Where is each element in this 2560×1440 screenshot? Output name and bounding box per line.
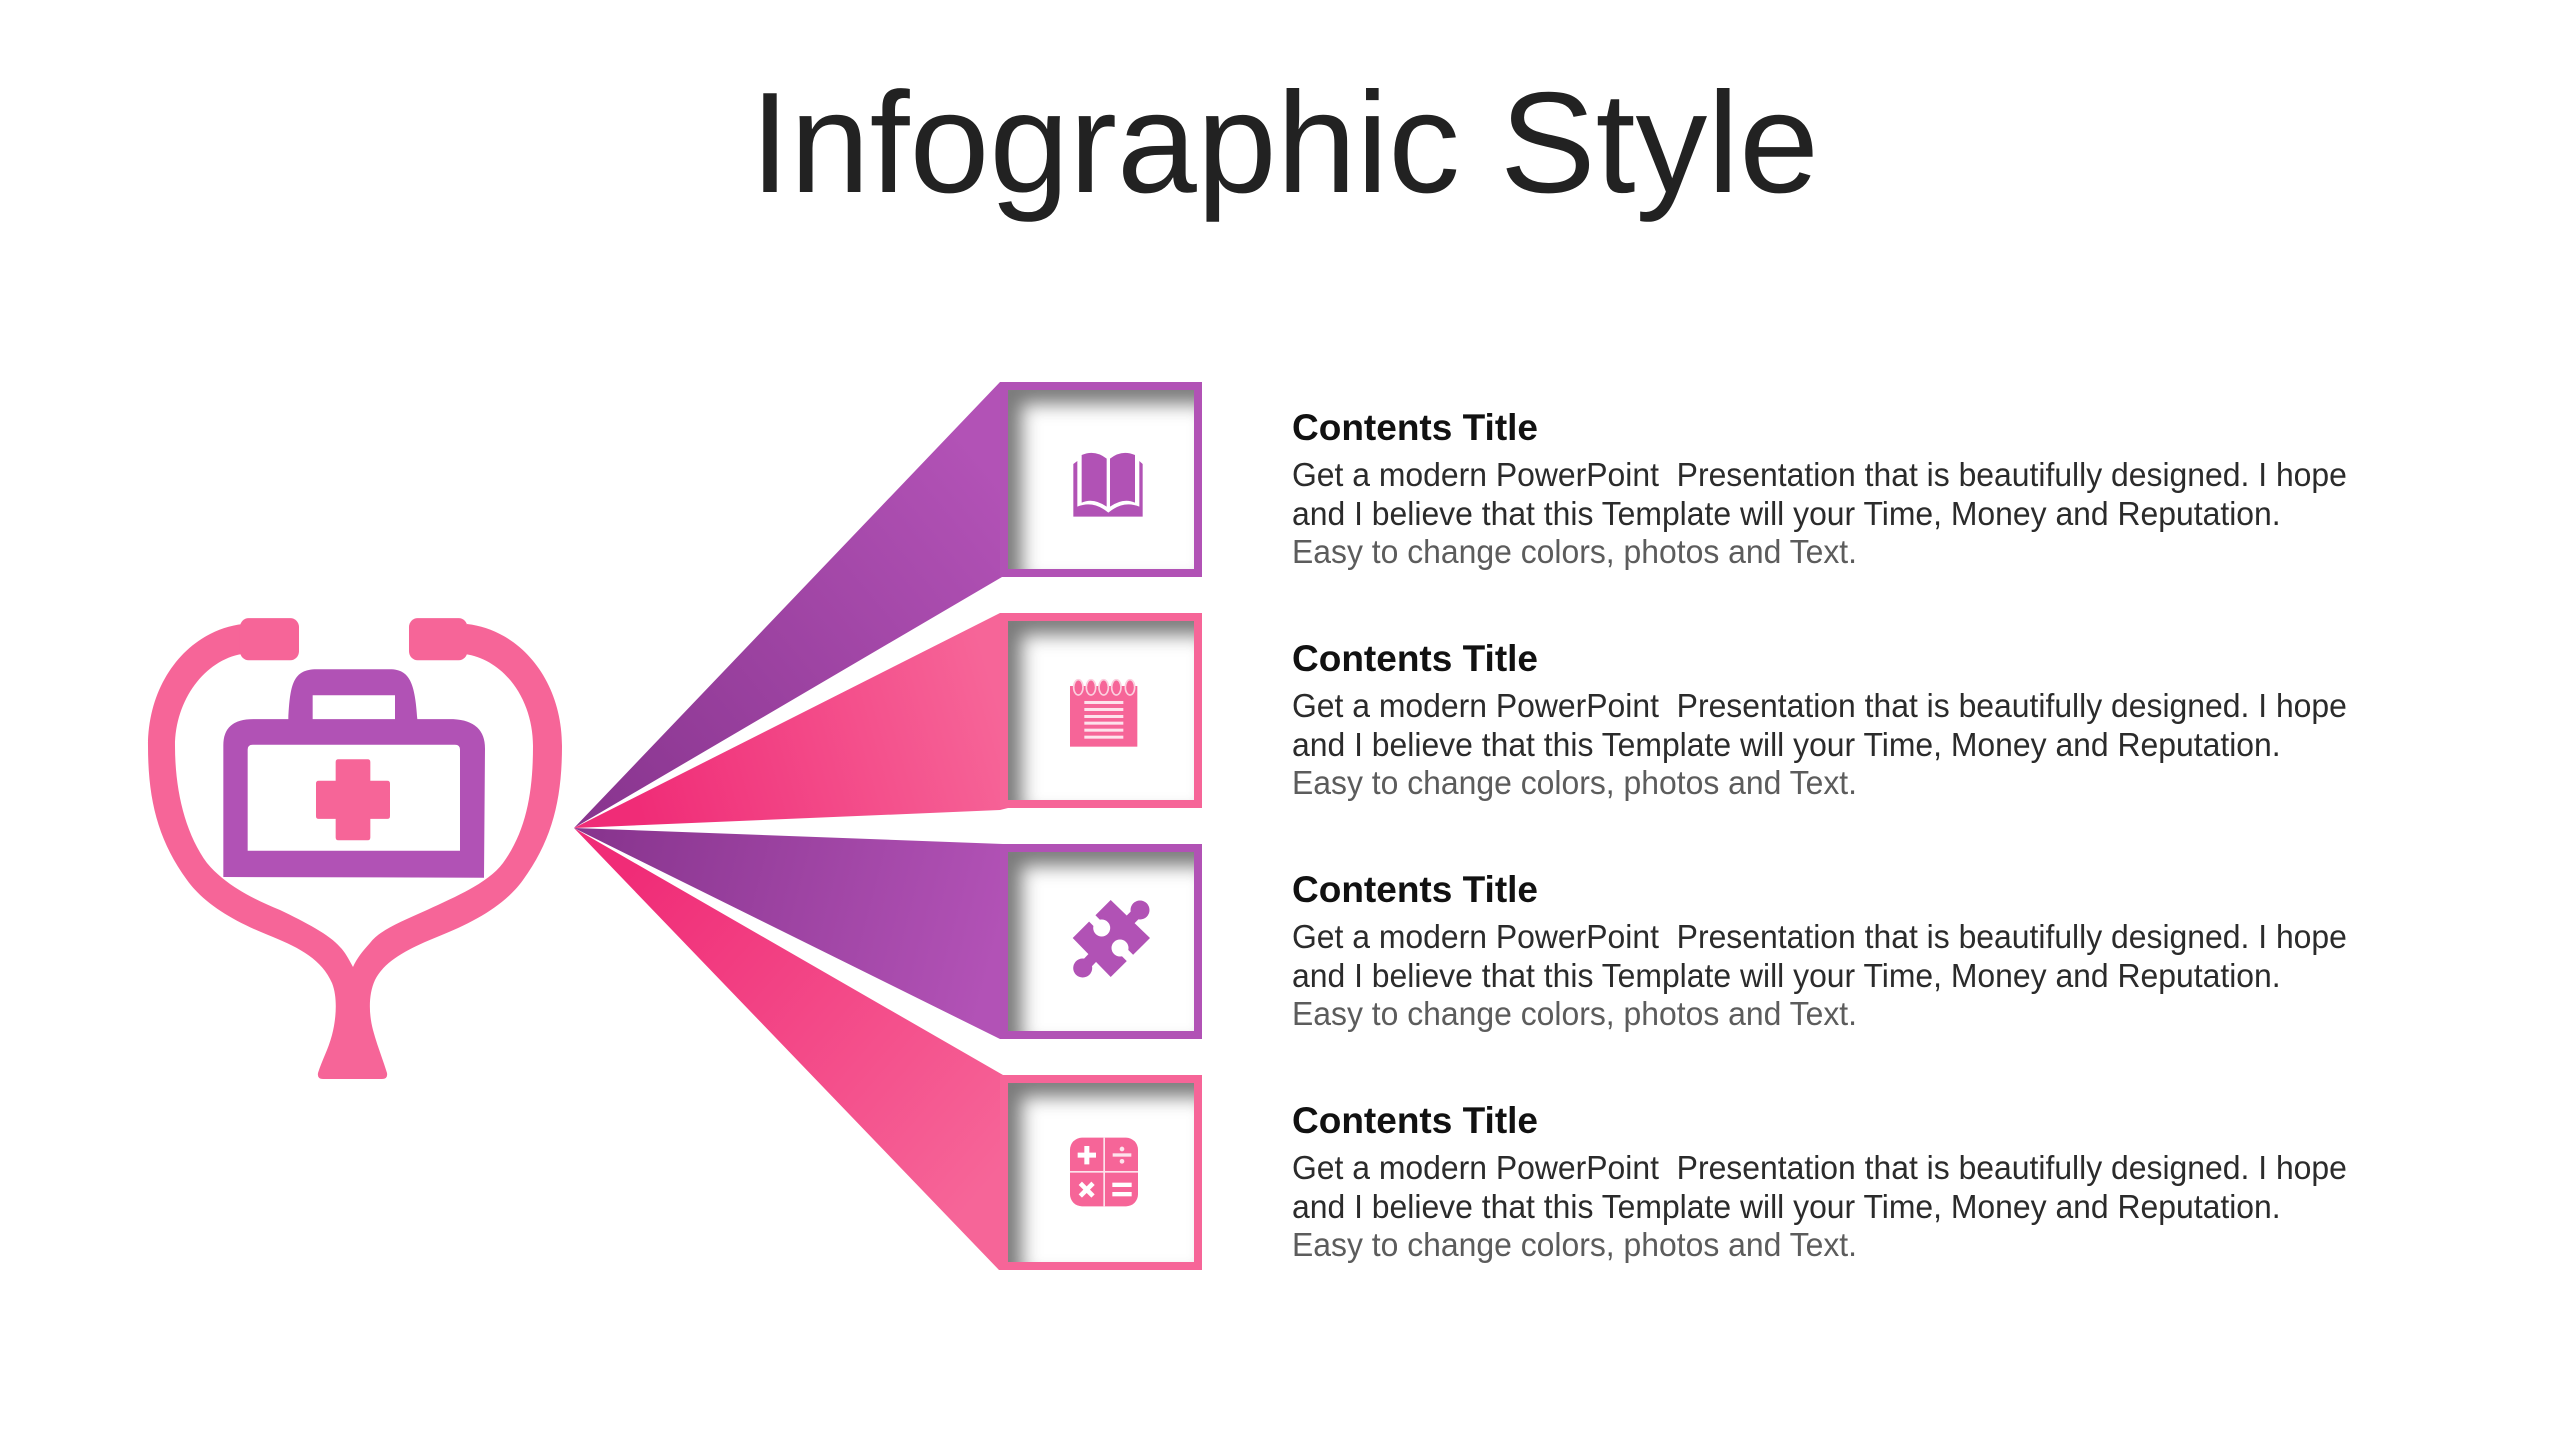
panel: box 4 <box>1000 1075 1202 1270</box>
wedge 2 <box>574 613 1012 828</box>
text block 1: and I believe that this Template will your Time, Money and Reputation. <box>1292 496 2281 532</box>
text block 2: Easy to change colors, photos and Text. <box>1292 765 1857 802</box>
right ear piece <box>409 618 467 660</box>
heading 3: Contents Title <box>1292 869 1538 910</box>
stethoscope tube <box>148 624 562 1079</box>
body 1: Get a modern PowerPoint Presentation that is beautifully designed. I hope <box>1292 457 2347 494</box>
body 3: Get a modern PowerPoint Presentation that is beautifully designed. I hope <box>1292 919 2347 956</box>
panel: box 3 <box>1000 844 1202 1039</box>
text block 2 <box>1292 638 2347 802</box>
text block 4: and I believe that this Template will your Time, Money and Reputation. <box>1292 1188 2281 1226</box>
heading 1: Contents Title <box>1292 407 1538 448</box>
panel: box 2 <box>1000 613 1202 808</box>
heading 2: Contents Title <box>1292 638 1538 679</box>
text block 2: and I believe that this Template will your Time, Money and Reputation. <box>1292 726 2281 764</box>
text block 3: Easy to change colors, photos and Text. <box>1292 996 1857 1033</box>
medical cross <box>316 759 390 840</box>
title: Infographic Style <box>750 63 1819 223</box>
text block 1: Easy to change colors, photos and Text. <box>1292 534 1857 571</box>
text block 3: and I believe that this Template will your Time, Money and Reputation. <box>1292 958 2281 994</box>
text block 3 <box>1292 869 2347 1033</box>
wedge 3 <box>574 828 1012 1039</box>
panel: box 1 <box>1000 382 1202 577</box>
text block 4: Easy to change colors, photos and Text. <box>1292 1227 1857 1264</box>
icon: puzzle piece <box>1073 900 1150 978</box>
wedge 4 <box>574 828 1012 1270</box>
medical bag <box>223 669 485 878</box>
icon: notepad <box>1070 680 1137 747</box>
text block 4 <box>1292 1100 2347 1264</box>
text block 1 <box>1292 407 2347 571</box>
icon: open book <box>1073 453 1143 517</box>
heading 4: Contents Title <box>1292 1100 1538 1141</box>
icon: calculator <box>1070 1138 1138 1206</box>
left ear piece <box>240 618 299 660</box>
wedge 1 <box>574 382 1012 828</box>
body 2: Get a modern PowerPoint Presentation that is beautifully designed. I hope <box>1292 688 2347 725</box>
body 4: Get a modern PowerPoint Presentation that is beautifully designed. I hope <box>1292 1150 2347 1187</box>
